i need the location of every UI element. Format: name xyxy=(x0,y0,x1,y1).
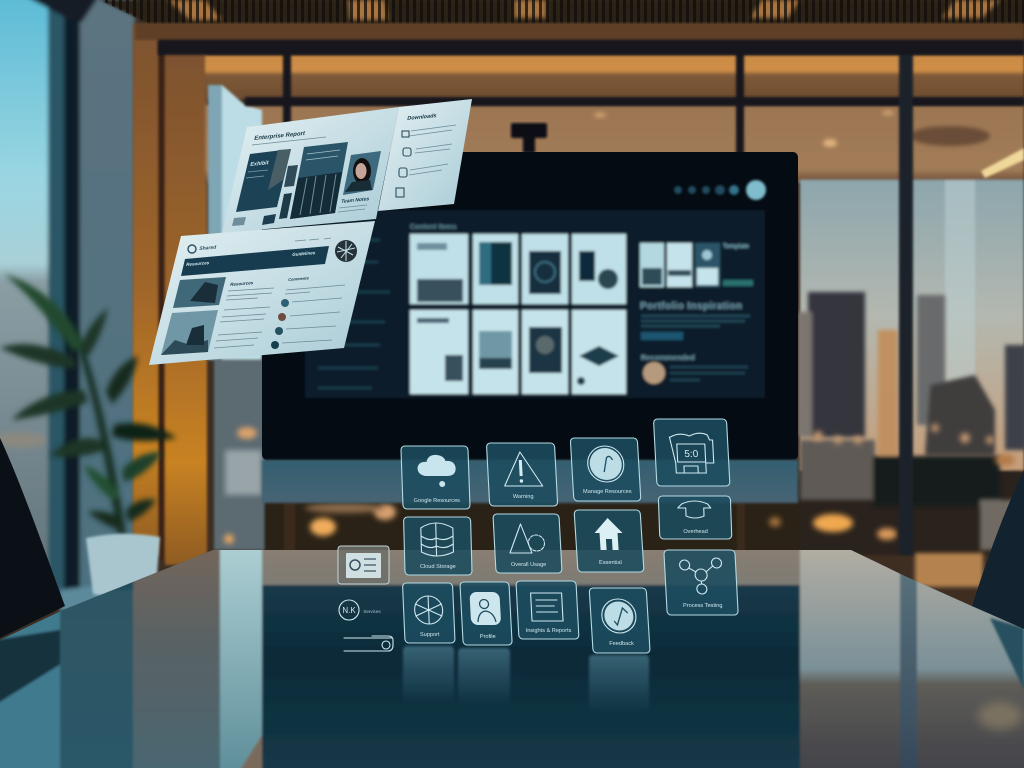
floating panel: main gallery sheet xyxy=(222,107,399,233)
right chair xyxy=(972,470,1024,629)
side panel headline: Portfolio Inspiration xyxy=(640,301,742,312)
icon: clock tile xyxy=(570,438,641,501)
icon: house tile xyxy=(574,510,644,572)
photo top xyxy=(173,277,226,308)
icon: house tile: Essential xyxy=(599,560,622,566)
monitor xyxy=(262,123,798,503)
panel heading: Downloads xyxy=(407,113,437,122)
icon: check tile: Feedback xyxy=(609,641,634,647)
poster image: Exhibit xyxy=(250,160,269,168)
tile reflections on table xyxy=(403,646,649,713)
small thumbnails xyxy=(232,165,298,226)
side panel thumbnails xyxy=(640,243,753,287)
testimonial avatar xyxy=(643,362,665,384)
icon: document tile xyxy=(516,581,579,639)
icon: wheel tile: Support xyxy=(420,632,440,638)
icon: molecule tile: Process Testing xyxy=(683,603,723,609)
header banner xyxy=(181,246,329,276)
profile avatar xyxy=(746,180,766,200)
icon: printer tile: 5:0 xyxy=(684,449,699,460)
document cards row 1 xyxy=(410,234,626,304)
left window and wall xyxy=(0,0,135,612)
screen content xyxy=(305,180,766,398)
side panel text lines xyxy=(641,316,750,326)
left white glass pane xyxy=(208,85,262,495)
window frames xyxy=(158,40,1024,555)
list icons xyxy=(396,131,411,197)
icon: clock tile: Manage Resources xyxy=(583,489,632,495)
icon: person tile xyxy=(460,582,512,645)
testimonial lines xyxy=(670,367,748,380)
comment avatars xyxy=(271,299,289,349)
icon: warning tile: Warning xyxy=(513,494,534,500)
city lights xyxy=(0,424,1015,544)
icon: database tile xyxy=(404,517,472,575)
navigation xyxy=(295,238,331,241)
photo bottom xyxy=(161,310,218,355)
portrait xyxy=(343,151,381,195)
icon: printer tile xyxy=(653,419,730,486)
ceiling light xyxy=(981,148,1024,178)
icon: cloud tile xyxy=(401,446,470,509)
caption: Team Notes xyxy=(341,196,370,205)
icon: badge with label xyxy=(339,600,381,620)
floating panel: article sheet: Shared xyxy=(199,245,217,252)
wood wall xyxy=(133,25,207,565)
side panel thumbnails: Template xyxy=(723,244,750,250)
ceiling spots and vent xyxy=(594,110,990,147)
icon: cloud tile: Google Resources xyxy=(414,498,460,504)
icon: document tile: Insights & Reports xyxy=(526,628,572,634)
icon: database tile: Cloud Storage xyxy=(420,564,456,570)
screen heading: Content Items xyxy=(410,224,457,231)
floating panel: article sheet xyxy=(149,221,375,365)
table xyxy=(0,540,1024,768)
webcam xyxy=(511,123,547,153)
icon: molecule tile xyxy=(664,550,738,615)
icon: triangle gauge tile xyxy=(493,514,562,573)
screen footer fade xyxy=(290,434,770,436)
sidebar menu xyxy=(312,240,390,388)
document cards row 2 xyxy=(410,310,626,394)
floating panel: downloads list xyxy=(378,99,472,211)
header dots xyxy=(674,185,739,195)
icon: id card tile xyxy=(338,546,389,584)
plant with pot xyxy=(0,274,176,596)
monitor body xyxy=(262,152,798,460)
ceiling slats xyxy=(100,0,1024,40)
logo xyxy=(188,245,196,253)
city poster xyxy=(290,142,348,219)
icon: box tile: Overhead xyxy=(683,529,708,535)
mosaic badge xyxy=(335,240,357,262)
floating panel: article sheet: Guidelines xyxy=(292,250,316,257)
testimonial heading: Recommended xyxy=(641,353,695,362)
icon: badge with label: Services xyxy=(363,609,381,614)
comments list: Comments xyxy=(288,275,310,282)
poster image xyxy=(236,149,291,212)
monitor base band xyxy=(262,460,798,503)
icon: slider bar xyxy=(344,636,393,651)
icon: triangle gauge tile: Overall Usage xyxy=(511,562,546,568)
floating panel: article sheet: Resources xyxy=(186,260,210,267)
interior glass room xyxy=(205,55,1024,555)
left chair xyxy=(0,438,65,638)
icon: badge with label: N.K xyxy=(342,606,356,615)
icon: check tile xyxy=(589,588,650,653)
list rows xyxy=(409,125,456,175)
icon: box tile xyxy=(658,496,732,539)
call to action button xyxy=(641,332,683,340)
article text: Resources xyxy=(230,280,254,287)
panel heading: Enterprise Report xyxy=(254,131,305,142)
icon: warning tile xyxy=(486,443,558,506)
city skyline xyxy=(798,292,1024,587)
icon: wheel tile xyxy=(402,583,455,643)
icon: person tile: Profile xyxy=(480,634,496,640)
